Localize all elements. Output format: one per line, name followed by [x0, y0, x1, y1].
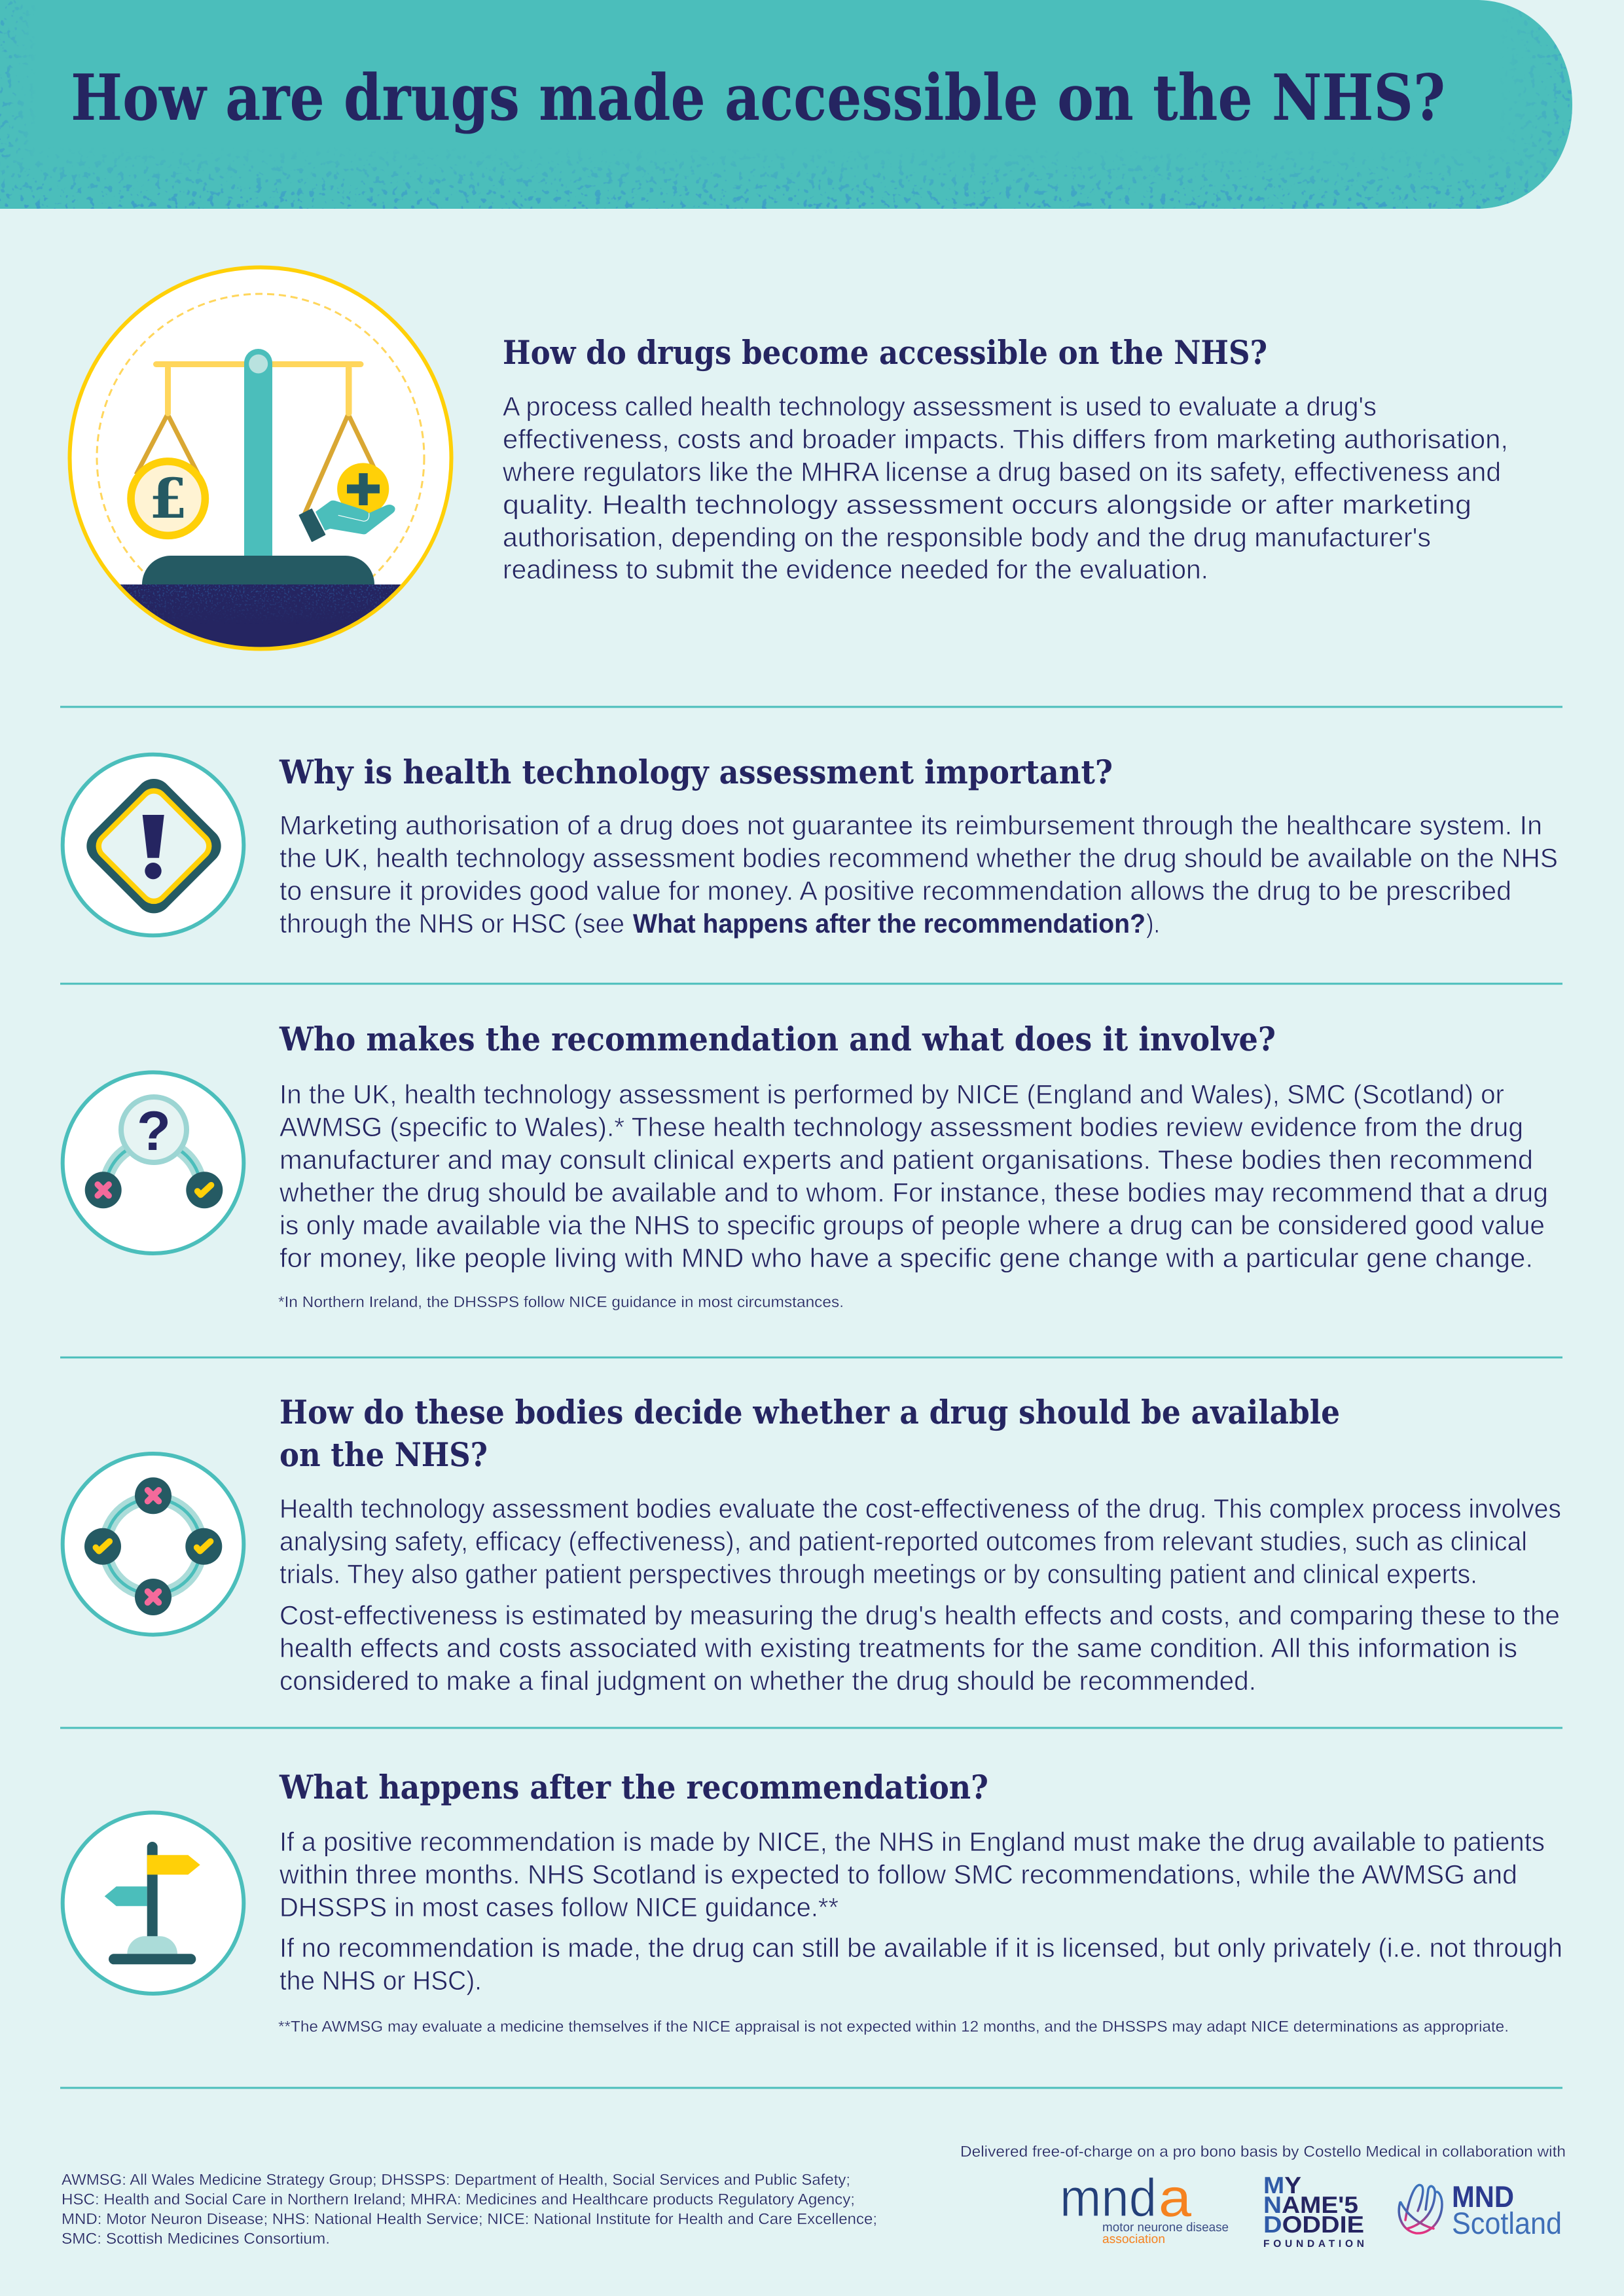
text block: AWMSG (specific to Wales).* These health technology assessment bodies review evidence from the drug [280, 1112, 1523, 1142]
icon: balance scales [65, 267, 458, 656]
panel: how do these bodies decide [63, 1393, 1561, 1696]
logo: MNDA: association [1102, 2233, 1165, 2246]
heading: Why is health technology assessment important? [279, 753, 1113, 791]
abbreviations [62, 2171, 877, 2247]
panel: how do drugs become accessible [65, 267, 1508, 656]
icon: warning diamond [63, 755, 244, 935]
text block: analysing safety, efficacy (effectiveness), and patient-reported outcomes from relevant studies, such as clinical [280, 1526, 1527, 1556]
abbreviations: HSC: Health and Social Care in Northern Ireland; MHRA: Medicines and Healthcare products Regulatory Agency; [62, 2191, 855, 2208]
logo: My Name'5 Doddie Foundation: MY [1263, 2172, 1301, 2198]
icon: cycle of ticks and crosses [63, 1454, 244, 1635]
logo: MNDA [1060, 2168, 1229, 2246]
abbreviations: SMC: Scottish Medicines Consortium. [62, 2230, 330, 2247]
text block: ). [1146, 908, 1160, 939]
text block: within three months. NHS Scotland is expected to follow SMC recommendations, while the AWMSG and [279, 1859, 1517, 1890]
logo: My Name'5 Doddie Foundation: FOUNDATION [1263, 2238, 1364, 2250]
logo: MND Scotland: Scotland [1452, 2206, 1562, 2240]
text block: manufacturer and may consult clinical experts and patient organisations. These bodies then recommend [280, 1145, 1533, 1175]
icon: question with decision paths [63, 1072, 244, 1253]
text block: effectiveness, costs and broader impacts. This differs from marketing authorisation, [503, 424, 1508, 454]
text block [280, 1494, 1561, 1696]
text block: authorisation, depending on the responsible body and the drug manufacturer's [503, 522, 1431, 552]
credit line: Delivered free-of-charge on a pro bono basis by Costello Medical in collaboration with [960, 2143, 1566, 2160]
icon: balance scales: £ [149, 466, 187, 531]
logo: MNDA: a [1159, 2168, 1191, 2228]
logo: My Name'5 Doddie Foundation: NAME'5 [1263, 2191, 1358, 2218]
logo: My Name'5 Doddie Foundation [1263, 2172, 1364, 2250]
text block: readiness to submit the evidence needed for the evaluation. [503, 554, 1208, 584]
header banner [0, 0, 1624, 209]
text block: In the UK, health technology assessment is performed by NICE (England and Wales), SMC (Scotland) or [280, 1079, 1504, 1109]
text block [279, 1827, 1562, 1996]
text block: for money, like people living with MND who have a specific gene change with a particular gene change. [280, 1243, 1533, 1273]
icon: signpost [63, 1812, 244, 1994]
heading: How do drugs become accessible on the NHS? [503, 333, 1267, 372]
footnote: *In Northern Ireland, the DHSSPS follow NICE guidance in most circumstances. [278, 1293, 844, 1310]
text block: is only made available via the NHS to specific groups of people where a drug can be considered good value [280, 1210, 1545, 1240]
text block: whether the drug should be available and to whom. For instance, these bodies may recommend that a drug [279, 1177, 1548, 1208]
logo: MNDA: motor neurone disease [1102, 2221, 1229, 2234]
abbreviations: MND: Motor Neuron Disease; NHS: National Health Service; NICE: National Institute for Health and Care Excellence; [62, 2210, 877, 2227]
icon: question with decision paths: ? [137, 1100, 171, 1162]
logo: MNDA: mnd [1060, 2168, 1157, 2228]
text block: considered to make a final judgment on whether the drug should be recommended. [280, 1666, 1256, 1696]
text block: the UK, health technology assessment bodies recommend whether the drug should be available on the NHS [280, 843, 1558, 873]
text block: Health technology assessment bodies evaluate the cost-effectiveness of the drug. This complex process involves [280, 1494, 1561, 1524]
logo: MND Scotland [1399, 2179, 1562, 2240]
text block [279, 1079, 1548, 1273]
panel: why is HTA important [63, 753, 1558, 939]
heading: What happens after the recommendation? [279, 1768, 988, 1806]
text block: What happens after the recommendation? [633, 908, 1146, 939]
text block: where regulators like the MHRA license a drug based on its safety, effectiveness and [502, 457, 1501, 487]
text block: quality. Health technology assessment occurs alongside or after marketing [503, 490, 1471, 520]
text block: If a positive recommendation is made by NICE, the NHS in England must make the drug available to patients [280, 1827, 1545, 1857]
text block: through the NHS or HSC (see [280, 908, 624, 939]
text block: Marketing authorisation of a drug does not guarantee its reimbursement through the healthcare system. In [280, 810, 1542, 840]
heading: How do these bodies decide whether a drug should be available [280, 1393, 1340, 1431]
text block: trials. They also gather patient perspectives through meetings or by consulting patient and clinical experts. [280, 1559, 1477, 1589]
title: How are drugs made accessible on the NHS? [71, 60, 1445, 135]
text block: the NHS or HSC). [280, 1965, 482, 1996]
panel: who makes the recommendation [63, 1020, 1548, 1310]
logo: MND Scotland: MND [1452, 2179, 1514, 2214]
logo: My Name'5 Doddie Foundation: DODDIE [1263, 2211, 1364, 2238]
text block: If no recommendation is made, the drug can still be available if it is licensed, but only privately (i.e. not through [280, 1933, 1562, 1963]
abbreviations: AWMSG: All Wales Medicine Strategy Group; DHSSPS: Department of Health, Social Services and Public Safety; [62, 2171, 850, 2188]
panel: how do these bodies decide: on the NHS? [280, 1435, 488, 1474]
text block: health effects and costs associated with existing treatments for the same condition. All this information is [280, 1633, 1517, 1663]
text block: DHSSPS in most cases follow NICE guidance.** [280, 1892, 839, 1922]
heading: Who makes the recommendation and what does it involve? [279, 1020, 1276, 1058]
text block [502, 391, 1508, 584]
text block [280, 810, 1558, 939]
text block: Cost-effectiveness is estimated by measuring the drug's health effects and costs, and comparing these to the [280, 1600, 1560, 1630]
panel: what happens after the recommendation [63, 1768, 1562, 2035]
text block: A process called health technology assessment is used to evaluate a drug's [503, 391, 1377, 422]
footnote: **The AWMSG may evaluate a medicine themselves if the NICE appraisal is not expected within 12 months, and the DHSSPS may adapt NICE determinations as appropriate. [278, 2018, 1509, 2035]
text block: to ensure it provides good value for money. A positive recommendation allows the drug to be prescribed [280, 876, 1511, 906]
